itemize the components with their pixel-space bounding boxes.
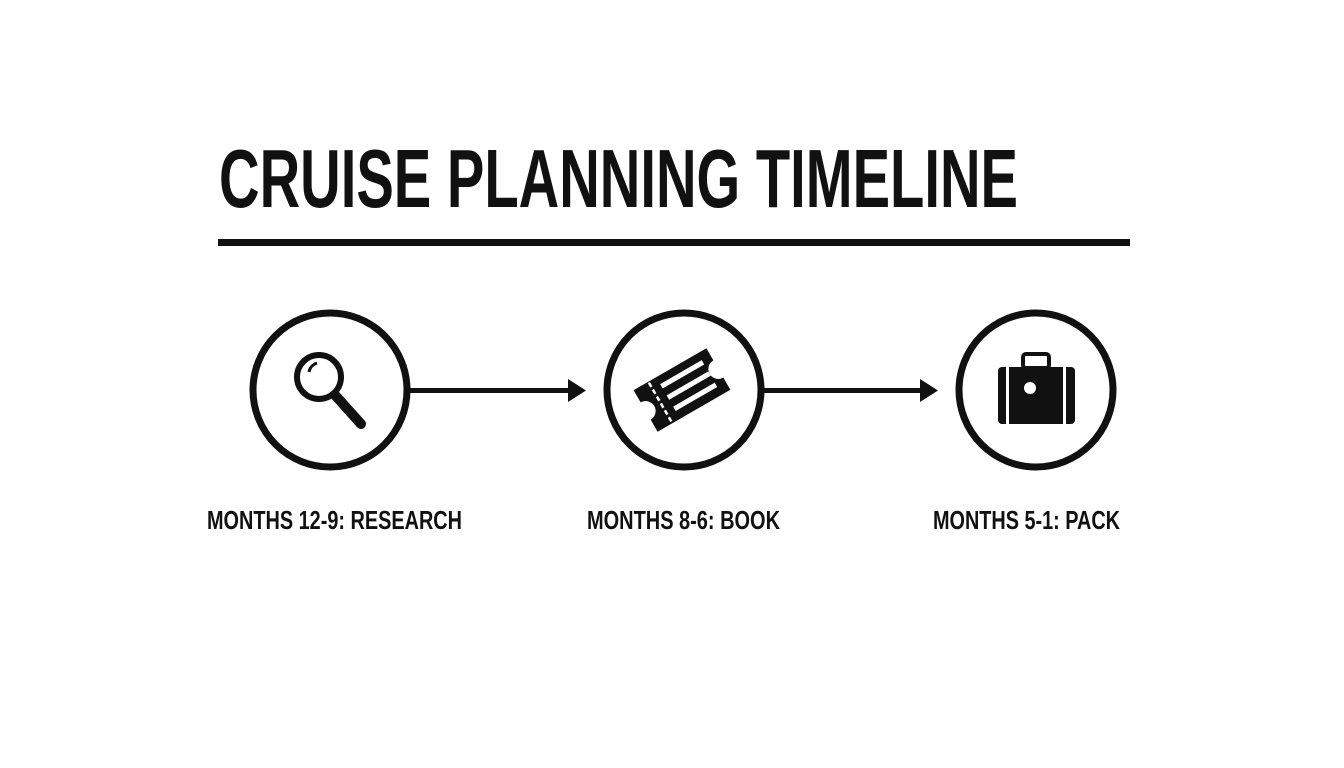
label: research: MONTHS 12-9: RESEARCH (207, 505, 462, 535)
step 3: pack (933, 313, 1120, 535)
step 1: research (207, 313, 462, 535)
arrow 1 (410, 379, 586, 402)
label: book: MONTHS 8-6: BOOK (587, 505, 780, 535)
title underline (218, 239, 1130, 246)
icon: ticket circle (607, 313, 761, 467)
arrow 2 (764, 379, 938, 402)
label: pack: MONTHS 5-1: PACK (933, 505, 1120, 535)
step 2: book (587, 313, 780, 535)
icon: suitcase circle (959, 313, 1113, 467)
icon: magnifier circle (253, 313, 407, 467)
